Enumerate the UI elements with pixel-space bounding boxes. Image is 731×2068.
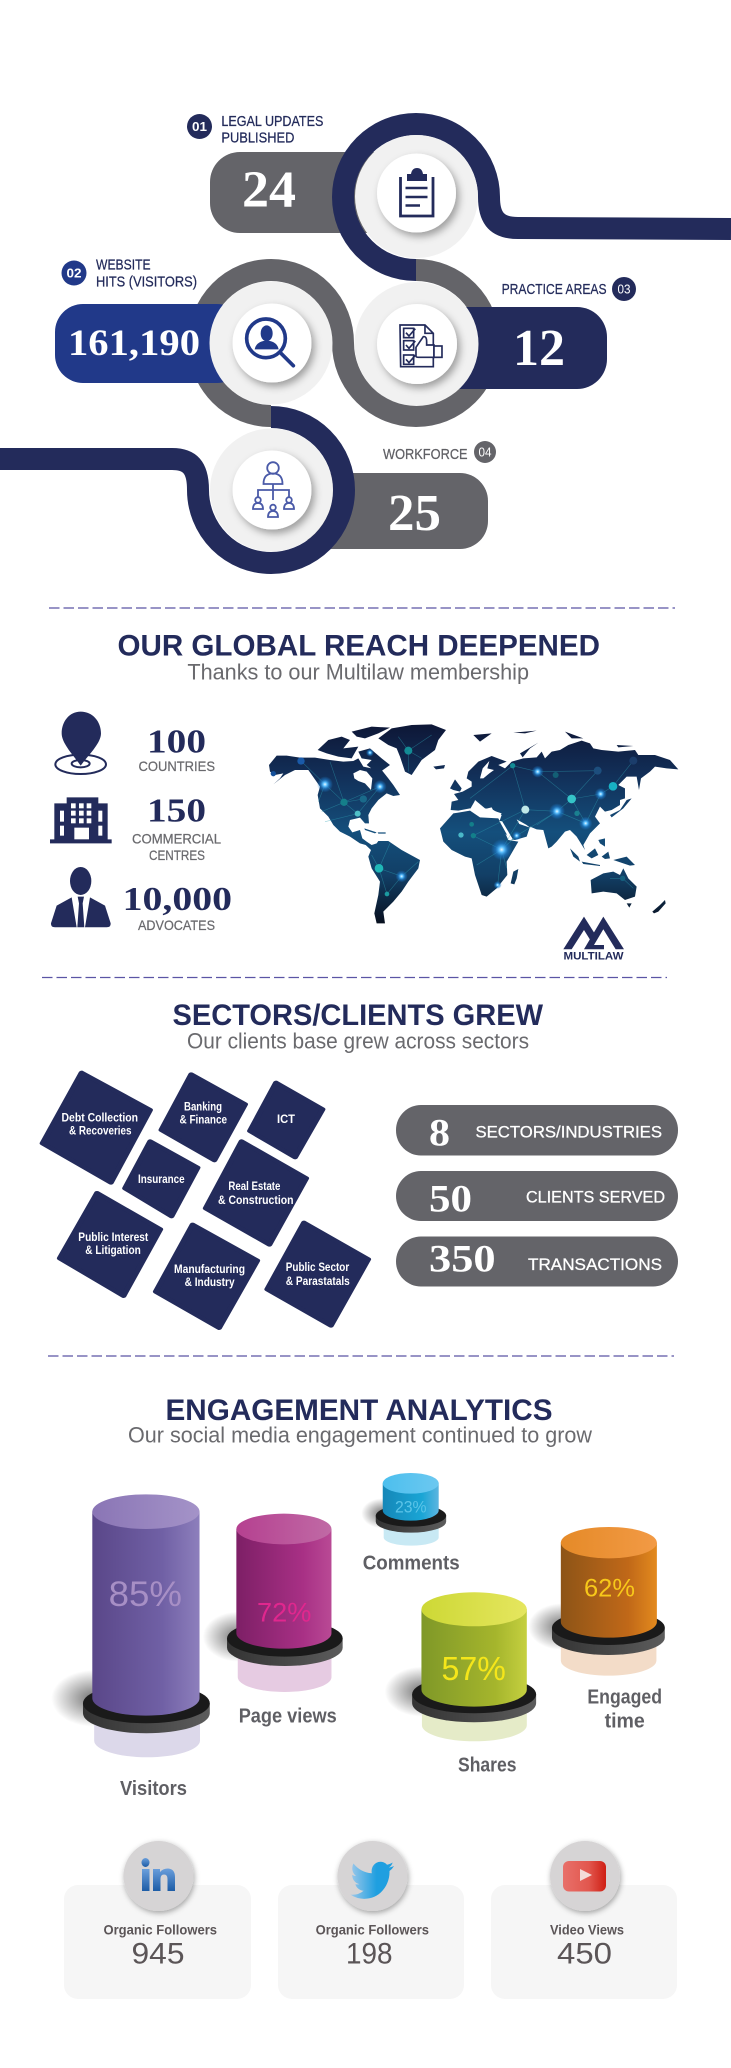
cylinder: visitors 85% — [51, 1494, 210, 1757]
card: YouTube video views — [491, 1841, 677, 1999]
card: YouTube video views: Video Views — [550, 1921, 624, 1937]
tile text: insurance: Insurance — [138, 1174, 185, 1186]
card: Twitter followers: Organic Followers — [316, 1921, 429, 1937]
card: LinkedIn followers — [64, 1841, 251, 1999]
icon: advocate in suit — [51, 867, 111, 927]
tile text: public sector and parastatals — [286, 1262, 350, 1288]
label: engaged time — [587, 1686, 662, 1733]
heading: global reach: Thanks to our Multilaw membership — [187, 659, 529, 684]
stat pill: sectors — [396, 1105, 678, 1156]
tile text: public sector and parastatals: Public Sector — [286, 1262, 350, 1274]
tile text: public sector and parastatals: & Parastatals — [286, 1276, 350, 1288]
network dots — [271, 747, 637, 896]
stat pill: clients — [396, 1171, 678, 1221]
label 01: legal updates published: PUBLISHED — [221, 129, 295, 146]
cylinder: engaged time 62%: 62% — [584, 1575, 635, 1603]
label 04: workforce: 04 — [478, 444, 492, 460]
stat pill: transactions — [396, 1236, 678, 1286]
stat: 150 commercial centres: 150 — [147, 793, 206, 830]
heading: global reach: OUR GLOBAL REACH DEEPENED — [118, 630, 600, 663]
label 01: legal updates published: LEGAL UPDATES — [221, 113, 323, 130]
panel: sector tiles — [42, 1073, 368, 1328]
logo: Multilaw: MULTILAW — [564, 950, 624, 962]
label: engaged time: Engaged — [587, 1686, 662, 1708]
stat: 100 countries: COUNTRIES — [138, 758, 215, 774]
label 04: workforce — [383, 441, 496, 463]
cylinder: shares 57% — [385, 1592, 536, 1741]
heading: engagement analytics: Our social media engagement continued to grow — [128, 1423, 593, 1448]
stat pill: transactions: 350 — [429, 1238, 496, 1281]
heading: sectors and clients: Our clients base grew across sectors — [187, 1028, 529, 1053]
icon: clipboard — [377, 154, 456, 232]
cylinder: comments 23% — [361, 1473, 446, 1546]
icon: magnifier with person — [232, 304, 312, 382]
heading: sectors and clients: SECTORS/CLIENTS GREW — [172, 999, 544, 1032]
stat: 10,000 advocates: ADVOCATES — [138, 917, 215, 933]
card: LinkedIn followers: Organic Followers — [104, 1921, 217, 1937]
tile text: debt collection: & Recoveries — [69, 1126, 132, 1138]
tile text: public interest and litigation: Public Interest — [78, 1232, 148, 1244]
card: Twitter followers — [278, 1841, 464, 1999]
stat: 100 countries — [138, 724, 215, 774]
card: YouTube video views: 450 — [557, 1937, 612, 1970]
heading: sectors and clients — [172, 999, 544, 1053]
icon: Twitter bird — [350, 1862, 394, 1899]
cylinder: shares 57%: 57% — [442, 1650, 506, 1687]
cylinder: engaged time 62% — [528, 1527, 665, 1676]
label 01: legal updates published — [187, 113, 323, 146]
label: engaged time: time — [605, 1711, 645, 1733]
stat: 150 commercial centres: CENTRES — [149, 847, 205, 863]
label 02: website hits: WEBSITE — [96, 256, 151, 273]
pill: workforce value: 25 — [388, 485, 441, 542]
cylinder: visitors 85%: 85% — [109, 1575, 182, 1614]
label 04: workforce: WORKFORCE — [383, 446, 468, 463]
label 01: legal updates published: 01 — [192, 119, 207, 134]
pill: website hits value: 161,190 — [68, 323, 200, 364]
tile text: real estate and construction: Real Estate — [228, 1181, 280, 1193]
tile text: public interest and litigation: & Litigation — [85, 1245, 141, 1257]
cylinder: page views 72% — [203, 1514, 343, 1692]
connector: grey S curve — [199, 270, 489, 416]
logo: Multilaw — [563, 917, 624, 962]
stat pill: clients: CLIENTS SERVED — [526, 1187, 665, 1206]
tile text: manufacturing and industry: & Industry — [185, 1277, 235, 1289]
connector: navy curve bottom left — [0, 417, 344, 563]
tile text: ICT: ICT — [277, 1114, 295, 1126]
stat pill: sectors: 8 — [429, 1112, 450, 1155]
label 02: website hits: HITS (VISITORS) — [96, 274, 197, 291]
tile text: manufacturing and industry — [174, 1264, 245, 1289]
cylinder: page views 72%: 72% — [257, 1598, 311, 1628]
stat: 10,000 advocates: 10,000 — [123, 881, 232, 918]
label 02: website hits: 02 — [66, 266, 82, 280]
cylinder: comments 23%: 23% — [395, 1497, 427, 1516]
label 03: practice areas — [502, 277, 636, 301]
pill: practice areas value: 12 — [513, 320, 565, 377]
stat: 10,000 advocates — [123, 881, 232, 933]
tile text: banking and finance: Banking — [184, 1102, 222, 1114]
stat: 100 countries: 100 — [147, 724, 206, 761]
label: visitors: Visitors — [120, 1778, 187, 1800]
icon: location pin — [55, 712, 106, 774]
connector: navy curve top right — [343, 124, 731, 270]
tile text: debt collection — [62, 1112, 138, 1138]
stat pill: sectors: SECTORS/INDUSTRIES — [476, 1122, 662, 1141]
label 03: practice areas: 03 — [618, 282, 630, 296]
pill: practice areas value — [430, 307, 607, 389]
icon: office building — [50, 797, 112, 843]
tile text: public interest and litigation — [78, 1232, 148, 1257]
stat pill: transactions: TRANSACTIONS — [528, 1255, 662, 1274]
label: comments: Comments — [363, 1552, 460, 1574]
tile text: manufacturing and industry: Manufacturing — [174, 1264, 245, 1276]
pill: website hits value — [55, 304, 245, 383]
tile text: real estate and construction: & Construction — [218, 1195, 294, 1207]
stat pill: clients: 50 — [429, 1178, 472, 1221]
card: Twitter followers: 198 — [346, 1937, 392, 1970]
stat: 150 commercial centres — [132, 793, 221, 863]
tile text: real estate and construction — [218, 1181, 294, 1207]
heading: engagement analytics — [128, 1394, 593, 1448]
pill: legal updates value: 24 — [242, 162, 296, 218]
label 03: practice areas: PRACTICE AREAS — [502, 281, 607, 298]
icon: LinkedIn — [142, 1858, 175, 1891]
pill: legal updates value — [210, 152, 472, 233]
label 02: website hits — [62, 256, 197, 291]
disc: light rings — [210, 135, 478, 552]
card: LinkedIn followers: 945 — [132, 1937, 184, 1970]
tile text: banking and finance: & Finance — [180, 1114, 227, 1126]
chart: world map with network — [269, 724, 678, 923]
icon: organisation chart — [232, 450, 312, 530]
label: page views: Page views — [239, 1705, 337, 1727]
stat: 150 commercial centres: COMMERCIAL — [132, 830, 221, 846]
icon: checklist with thumbs up — [377, 304, 457, 384]
heading: global reach — [118, 630, 600, 684]
pill: workforce value — [300, 473, 488, 549]
tile text: banking and finance — [180, 1102, 227, 1126]
heading: engagement analytics: ENGAGEMENT ANALYTICS — [166, 1394, 552, 1427]
icon: YouTube — [563, 1861, 606, 1892]
tile text: debt collection: Debt Collection — [62, 1112, 138, 1124]
label: shares: Shares — [458, 1755, 516, 1777]
flow diagram: key statistics — [0, 113, 731, 563]
